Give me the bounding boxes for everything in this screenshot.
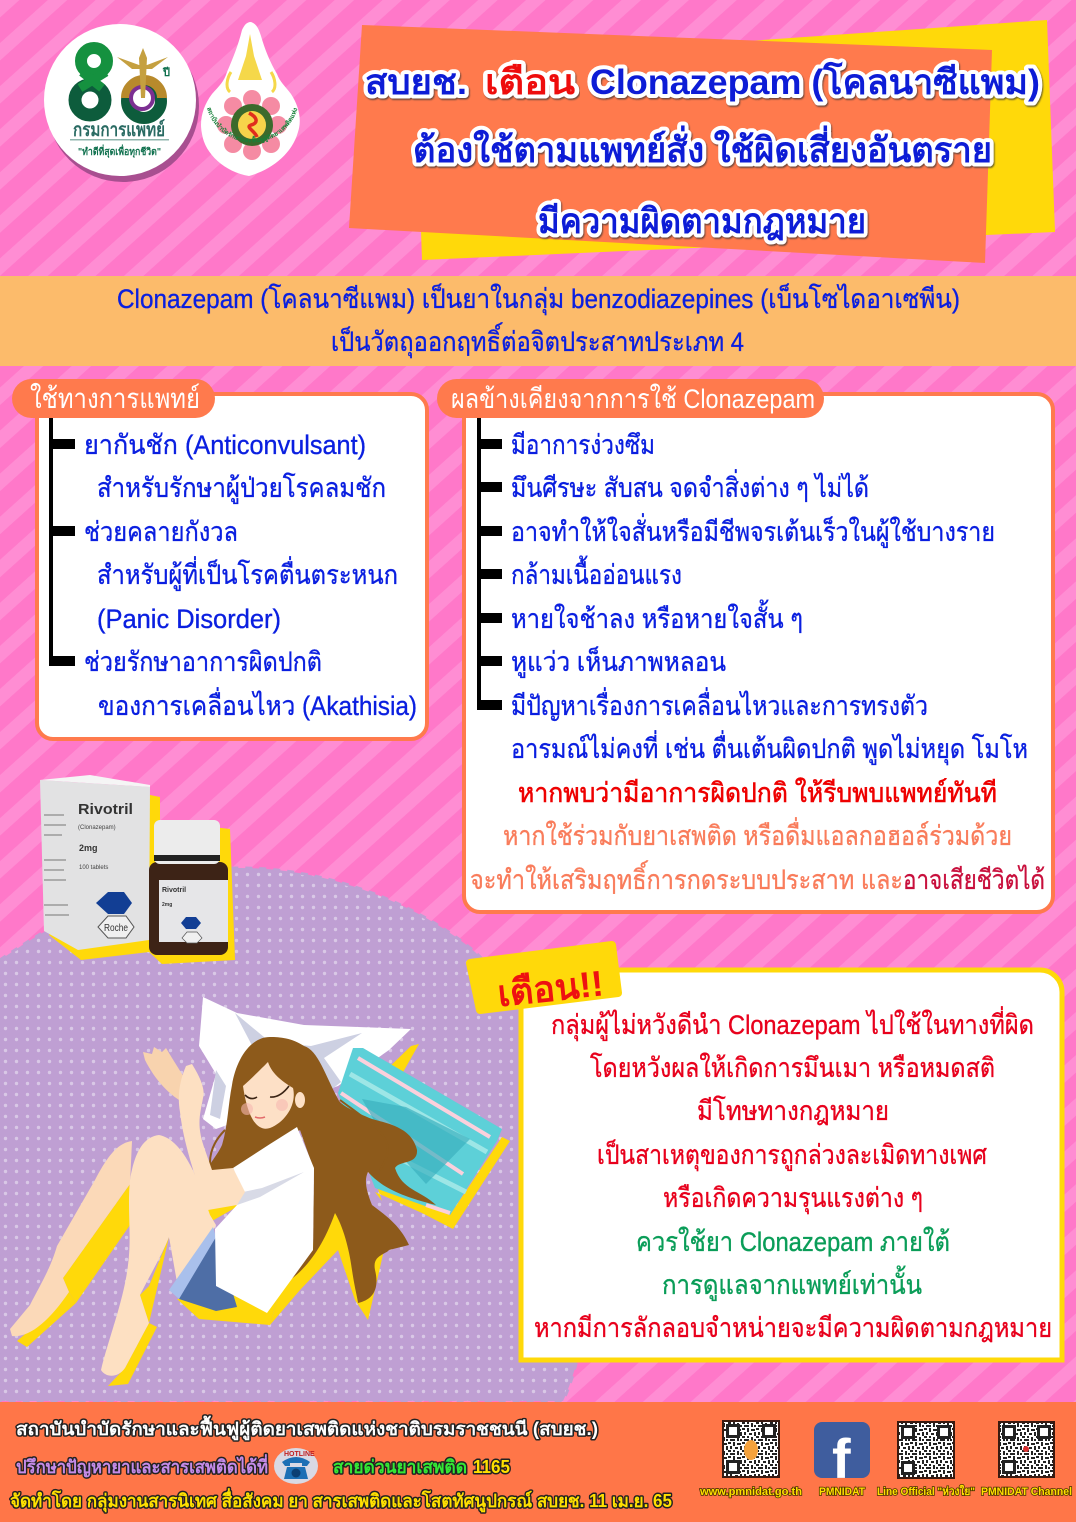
logo: PMNIDAT institute emblem — [201, 22, 300, 176]
combination warning — [470, 817, 1045, 895]
pill heading: side effects: ผลข้างเคียงจากการใช้ Clonazepam — [451, 383, 815, 414]
QR captions: Line Official "ห่วงใย" — [877, 1484, 975, 1498]
branch lines — [477, 418, 502, 710]
title line 1: Clonazepam (โคลนาซีแพม) — [590, 61, 1040, 102]
list of medical uses: ช่วยรักษาอาการผิดปกติ — [84, 647, 322, 677]
medicine box: Rivotril — [78, 801, 133, 818]
warning text: โดยหวังผลให้เกิดการมึนเมา หรือหมดสติ — [590, 1052, 995, 1083]
medicine bottle: Rivotril — [162, 887, 186, 894]
illustration: Rivotril box and bottle — [40, 775, 235, 964]
icon: Facebook — [814, 1422, 870, 1490]
medicine box: Roche — [104, 923, 128, 934]
warning text: เป็นสาเหตุของการถูกล่วงละเมิดทางเพศ — [597, 1137, 987, 1172]
list of side effects: มีอาการง่วงซึม — [511, 430, 655, 460]
hotline text: 1165 — [473, 1457, 510, 1477]
list of side effects: กล้ามเนื้ออ่อนแรง — [511, 555, 682, 590]
title line 3: มีความผิดตามกฎหมาย — [538, 202, 866, 241]
QR captions — [699, 1484, 1072, 1498]
institute name: สถาบันบำบัดรักษาและฟื้นฟูผู้ติดยาเสพติดแห่งชาติบรมราชชนนี (สบยช.) — [16, 1415, 598, 1441]
warning text — [534, 1006, 1052, 1343]
QR: website — [722, 1420, 780, 1478]
warning text: หรือเกิดความรุนแรงต่าง ๆ — [663, 1183, 923, 1215]
panel: medical uses — [12, 379, 427, 739]
pill heading: medical uses — [12, 379, 215, 418]
arm and hands — [143, 1047, 245, 1210]
QR captions: PMNIDAT — [819, 1486, 865, 1498]
medicine bottle: 2mg — [162, 902, 172, 908]
yellow shadows — [17, 1044, 510, 1386]
branch lines — [49, 418, 75, 666]
list of medical uses: สำหรับรักษาผู้ป่วยโรคลมชัก — [97, 473, 386, 504]
icon: hotline telephone — [274, 1448, 318, 1484]
header title banner — [349, 20, 1055, 263]
list of medical uses: สำหรับผู้ที่เป็นโรคตื่นตระหนก — [97, 556, 398, 591]
list of side effects: หายใจช้าลง หรือหายใจสั้น ๆ — [511, 599, 803, 634]
consultation line: ปรึกษาปัญหายาและสารเสพติดได้ที่ — [16, 1454, 268, 1478]
front leg and thigh — [101, 1135, 216, 1376]
warning badge: เตือน!! — [496, 962, 605, 1014]
list of medical uses: ยากันชัก (Anticonvulsant) — [84, 430, 366, 460]
shirt — [215, 1127, 314, 1313]
logo: Department of Medical Services 80 years: ปี — [162, 66, 170, 79]
shorts — [169, 1227, 237, 1311]
medicine bottle — [149, 820, 228, 955]
banner yellow back — [420, 20, 1055, 260]
warning text: การดูแลจากแพทย์เท่านั้น — [662, 1265, 922, 1301]
title line 1 — [365, 61, 1040, 102]
warning badge — [470, 945, 618, 1014]
pill heading: side effects — [437, 379, 824, 418]
hotline text: สายด่วนยาเสพติด — [333, 1457, 467, 1477]
list of medical uses: (Panic Disorder) — [97, 604, 281, 634]
title line 1: สบยช. — [365, 63, 467, 102]
back leg — [10, 1141, 132, 1336]
illustration: sleeping woman — [10, 997, 510, 1386]
yellow shadow — [49, 795, 235, 964]
dotted purple blob — [0, 868, 585, 1401]
list of side effects: มีปัญหาเรื่องการเคลื่อนไหวและการทรงตัว — [511, 687, 928, 721]
logo: Department of Medical Services 80 years — [44, 24, 199, 182]
combination warning: หากใช้ร่วมกับยาเสพติด หรือดื่มแอลกอฮอล์ร่วมด้วย — [503, 817, 1012, 851]
medicine box: 2mg — [79, 843, 98, 853]
credit line: จัดทำโดย กลุ่มงานสารนิเทศ สื่อสังคม ยา สารเสพติดและโสตทัศนูปกรณ์ สบยช. 11 เม.ย. 65 — [10, 1488, 672, 1513]
list of side effects — [511, 430, 1028, 766]
icon: Facebook: f — [832, 1427, 851, 1490]
list of medical uses: ช่วยคลายกังวล — [84, 517, 238, 547]
list of medical uses — [84, 430, 417, 721]
warning text: มีโทษทางกฎหมาย — [697, 1096, 889, 1126]
combination warning: จะทำให้เสริมฤทธิ์การกดระบบประสาท และ — [470, 860, 903, 895]
logo: Department of Medical Services 80 years: กรมการแพทย์ — [73, 119, 165, 141]
pillow — [199, 997, 411, 1129]
pill heading: medical uses: ใช้ทางการแพทย์ — [30, 382, 200, 414]
footer — [0, 1402, 1076, 1522]
list of side effects: อาจทำให้ใจสั่นหรือมีชีพจรเต้นเร็วในผู้ใช้บางราย — [511, 513, 995, 548]
QR: Line official — [897, 1421, 955, 1479]
QR: YouTube channel — [998, 1421, 1055, 1478]
hair — [208, 1037, 436, 1303]
combination warning: อาจเสียชีวิตได้ — [903, 865, 1045, 895]
QR captions: www.pmnidat.go.th — [699, 1486, 802, 1498]
title line 1: เตือน — [485, 63, 575, 102]
list of side effects: หูแว่ว เห็นภาพหลอน — [511, 644, 726, 678]
medicine box: (Clonazepam) — [78, 825, 116, 831]
list of side effects: มึนศีรษะ สับสน จดจำสิ่งต่าง ๆ ไม่ได้ — [511, 469, 869, 503]
blanket — [338, 1048, 502, 1215]
header logos — [44, 22, 300, 182]
banner orange front — [349, 25, 992, 263]
title line 2: ต้องใช้ตามแพทย์สั่ง ใช้ผิดเสี่ยงอันตราย — [413, 125, 992, 170]
panel: warning — [470, 945, 1062, 1360]
intro line 2: เป็นวัตถุออกฤทธิ์ต่อจิตประสาทประเภท 4 — [331, 322, 744, 359]
medicine box — [40, 775, 150, 950]
intro band — [0, 276, 1076, 366]
panel: side effects — [437, 379, 1053, 912]
medicine box: 100 tablets — [79, 865, 108, 871]
face — [241, 1062, 305, 1129]
intro line 1: Clonazepam (โคลนาซีแพม) เป็นยาในกลุ่ม benzodiazepines (เบ็นโซไดอาเซพีน) — [117, 281, 960, 316]
warning text: ควรใช้ยา Clonazepam ภายใต้ — [636, 1226, 950, 1257]
QR captions: PMNIDAT Channel — [981, 1486, 1072, 1498]
list of medical uses: ของการเคลื่อนไหว (Akathisia) — [98, 687, 417, 721]
icon: hotline telephone: HOTLINE — [284, 1451, 315, 1458]
see doctor warning: หากพบว่ามีอาการผิดปกติ ให้รีบพบแพทย์ทันที — [518, 777, 997, 808]
logo: Department of Medical Services 80 years: "ทำดีที่สุดเพื่อทุกชีวิต" — [78, 144, 161, 158]
